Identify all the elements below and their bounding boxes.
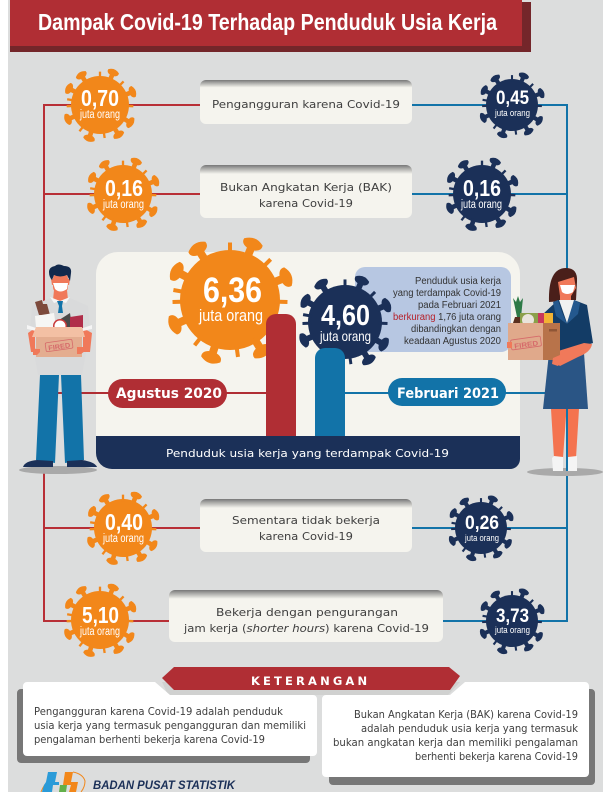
virus: navy 0,45: 0,45 [496, 88, 529, 109]
panel: shorter hours category box: jam kerja ( shorter hours ) karena Covid-19 [183, 623, 429, 635]
panel: temporarily not working category box: karena Covid-19 [259, 531, 353, 543]
panel: top-left category box [200, 80, 412, 124]
mask [560, 285, 575, 294]
virus: navy 0,16: juta orang [460, 199, 502, 211]
blue connector over legs [566, 409, 568, 471]
panel: definition BAK: berhenti bekerja karena Covid-19 [415, 751, 578, 763]
panel: definition BAK [322, 682, 595, 785]
cardboard box with FIRED stamp: FIRED [48, 342, 71, 352]
panel: shorter hours category box [169, 590, 443, 642]
illustration: woman holding box [507, 268, 603, 476]
virus: orange 0,16 [86, 156, 161, 232]
title banner: Dampak Covid-19 Terhadap Penduduk Usia Kerja [38, 9, 497, 35]
virus: navy 3,73: juta orang [494, 625, 530, 636]
panel: definition Pengangguran: usia kerja yang termasuk pengangguran dan memiliki [34, 720, 306, 732]
hand on box [507, 342, 512, 348]
collar and tie [50, 297, 70, 303]
virus: navy 0,26: juta orang [464, 533, 499, 544]
bar: Februari 2021 [315, 348, 345, 436]
callout: summary: berkurang 1,76 juta orang [393, 312, 501, 323]
virus: orange 5,10: juta orang [79, 626, 120, 638]
cardboard box with FIRED stamp: FIRED [514, 340, 539, 351]
panel: BAK category box [200, 165, 412, 218]
hair [49, 264, 71, 281]
skirt [543, 353, 588, 409]
sleeve cuffs [27, 325, 92, 331]
callout: summary: dibandingkan dengan [411, 324, 501, 335]
virus: navy 4,60: juta orang [319, 328, 371, 344]
jacket [541, 300, 593, 354]
virus: orange 0,16: juta orang [102, 199, 144, 211]
callout: summary: Penduduk usia kerja [415, 276, 501, 287]
red connector lines [44, 105, 200, 621]
virus: orange 5,10 [63, 582, 138, 658]
virus: orange 0,70: juta orang [79, 109, 120, 121]
blue connector lines [412, 105, 567, 621]
shadow [19, 466, 97, 474]
virus: navy 0,16: 0,16 [463, 175, 501, 201]
pill: Agustus 2020 [108, 379, 227, 408]
virus: orange 6,36: 6,36 [203, 271, 262, 310]
bottom band [96, 436, 520, 469]
virus: orange 6,36 [165, 235, 295, 366]
virus: navy 0,45: juta orang [494, 108, 530, 119]
virus: navy 4,60: 4,60 [321, 300, 370, 332]
panel: top-left category box: Pengangguran karena Covid-19 [212, 99, 400, 111]
virus: orange 0,40 [86, 490, 161, 566]
panel: BAK category box: karena Covid-19 [259, 198, 353, 210]
shoes [23, 460, 97, 467]
panel background [96, 252, 520, 436]
arms [28, 328, 92, 352]
virus: orange 0,70: 0,70 [81, 85, 119, 111]
hands [33, 347, 85, 355]
trousers [36, 375, 84, 463]
virus: navy 0,16 [445, 156, 520, 232]
face and neck [558, 277, 576, 304]
virus: orange 0,16: 0,16 [105, 175, 143, 201]
callout: summary: keadaan Agustus 2020 [404, 336, 501, 347]
cardboard box with FIRED stamp [508, 323, 560, 360]
panel: temporarily not working category box [200, 499, 412, 552]
title banner [10, 0, 531, 52]
virus: navy 0,26: 0,26 [465, 513, 499, 534]
arm [553, 343, 592, 366]
plant and goods [513, 296, 523, 317]
panel: definition Pengangguran: pengalaman berhenti bekerja karena Covid-19 [34, 734, 265, 746]
ears [51, 279, 70, 285]
virus: navy 0,45 [478, 71, 546, 139]
pill: Februari 2021: Februari 2021 [397, 386, 499, 402]
panel: definition Pengangguran: Pengangguran karena Covid-19 adalah penduduk [34, 706, 284, 718]
panel: shorter hours category box: Bekerja dengan pengurangan [216, 607, 398, 619]
logo: Badan Pusat Statistik: BADAN PUSAT STATISTIK [93, 778, 236, 792]
heading: Keterangan ribbon: KETERANGAN [251, 674, 371, 688]
hair [549, 268, 577, 302]
panel: definition BAK: bukan angkatan kerja dan memiliki pengalaman [333, 737, 578, 749]
callout: summary: pada Februari 2021 [418, 300, 501, 311]
bar: Agustus 2020 [266, 314, 296, 436]
panel: BAK category box: Bukan Angkatan Kerja (BAK) [220, 182, 392, 194]
cardboard box with FIRED stamp [32, 327, 85, 357]
panel: central comparison [96, 235, 520, 469]
virus: orange 6,36: juta orang [198, 306, 263, 325]
heading: Keterangan ribbon [162, 667, 460, 695]
virus: navy 4,60 [297, 274, 393, 371]
virus: orange 0,40: juta orang [102, 533, 144, 545]
callout: summary: yang terdampak Covid-19 [393, 288, 501, 299]
box contents [35, 300, 50, 315]
virus: navy 3,73 [478, 587, 546, 655]
neck and face [53, 290, 68, 303]
virus: orange 0,40: 0,40 [105, 509, 143, 535]
panel: definition BAK: adalah penduduk usia kerja yang termasuk [361, 723, 579, 735]
panel: definition BAK: Bukan Angkatan Kerja (BAK) karena Covid-19 [354, 709, 578, 721]
blouse [559, 300, 574, 323]
pill: Agustus 2020: Agustus 2020 [116, 386, 222, 402]
callout: summary [355, 267, 511, 352]
panel: temporarily not working category box: Sementara tidak bekerja [232, 515, 380, 527]
pill line red [58, 392, 266, 394]
lapels [553, 300, 580, 324]
virus: orange 0,70 [63, 67, 138, 143]
virus: orange 5,10: 5,10 [82, 602, 119, 628]
bottom band: Penduduk usia kerja yang terdampak Covid-19 [166, 448, 449, 460]
virus: navy 3,73: 3,73 [496, 606, 529, 627]
logo: Badan Pusat Statistik [41, 772, 236, 792]
shadow [527, 468, 603, 476]
pill: Februari 2021 [388, 378, 506, 406]
shoes [552, 456, 577, 471]
mask [53, 283, 68, 292]
illustration: man holding box [19, 264, 97, 474]
legs [551, 409, 579, 458]
virus: navy 0,26 [447, 494, 515, 562]
shirt [30, 298, 90, 375]
pill line blue [345, 392, 545, 394]
panel: definition Pengangguran [17, 682, 317, 763]
logo mark [41, 772, 85, 792]
